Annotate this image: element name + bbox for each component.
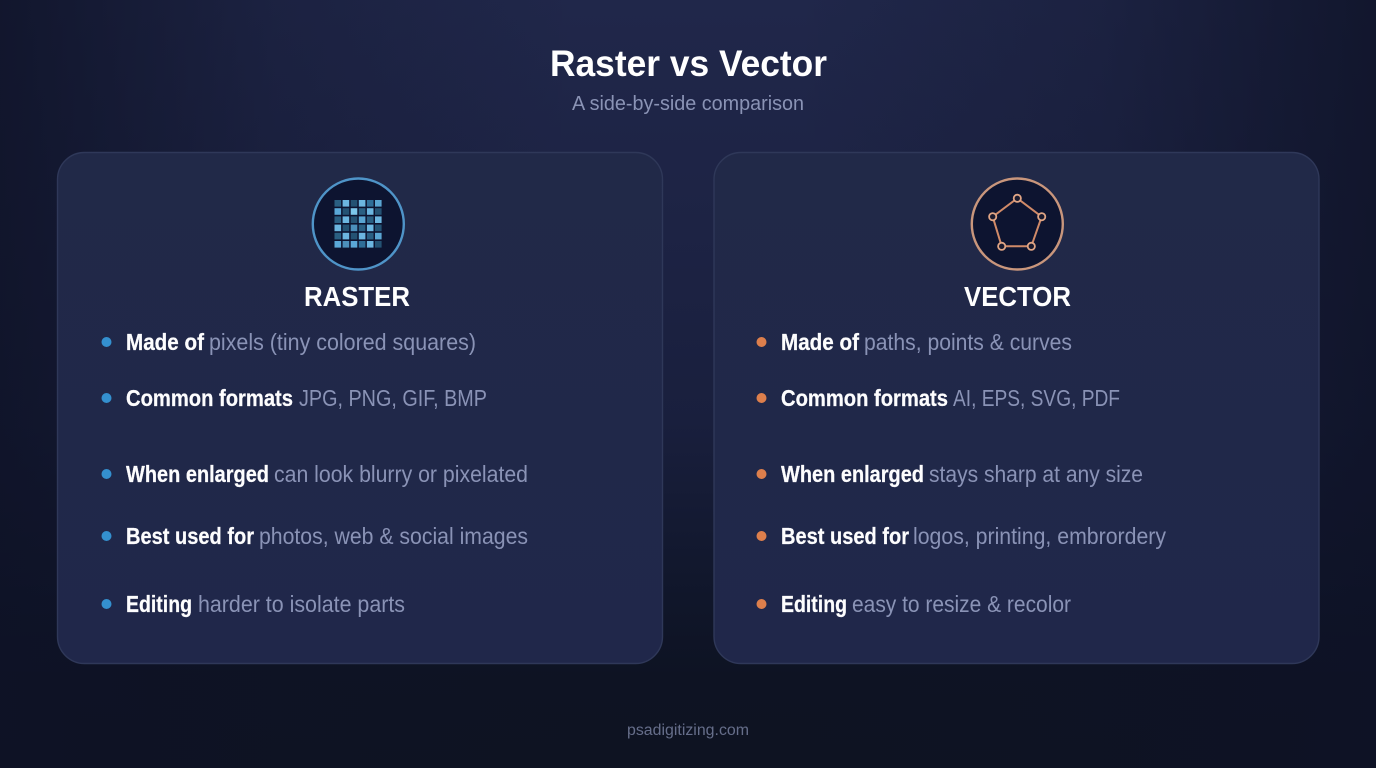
item: when enlarged: When enlarged (126, 461, 269, 487)
heading: raster: RASTER (304, 281, 410, 312)
item: best used for: Best used for (781, 523, 909, 549)
item: common formats (102, 385, 487, 411)
item: best used for: photos, web & social images (259, 523, 528, 549)
panel background: vector (714, 152, 1319, 664)
item: when enlarged: stays sharp at any size (929, 461, 1143, 487)
icon: pixel grid (313, 178, 404, 270)
item: best used for (102, 523, 528, 549)
item: editing: Editing (781, 591, 847, 617)
item: editing: easy to resize & recolor (852, 591, 1071, 617)
item: made of: Made of (126, 329, 204, 355)
item: made of (756, 329, 1072, 355)
item: when enlarged: When enlarged (781, 461, 924, 487)
item: made of: pixels (tiny colored squares) (209, 329, 476, 355)
item: common formats: Common formats (781, 385, 948, 411)
subtitle: A side-by-side comparison (572, 93, 804, 115)
panel background: raster (58, 152, 662, 664)
item: when enlarged (102, 461, 528, 487)
item: made of: Made of (781, 329, 859, 355)
item: editing: harder to isolate parts (198, 591, 405, 617)
panel: raster (58, 152, 662, 664)
item: when enlarged (756, 461, 1143, 487)
item: editing: Editing (126, 591, 192, 617)
item: when enlarged: can look blurry or pixelated (274, 461, 528, 487)
item: common formats: JPG, PNG, GIF, BMP (299, 385, 487, 411)
item: best used for: Best used for (126, 523, 254, 549)
item: editing (756, 591, 1071, 617)
item: common formats: Common formats (126, 385, 293, 411)
item: made of: paths, points & curves (864, 329, 1072, 355)
item: common formats (756, 385, 1120, 411)
footer: website: psadigitizing.com (627, 722, 749, 739)
icon: pentagon path (972, 178, 1063, 270)
item: common formats: AI, EPS, SVG, PDF (953, 385, 1120, 411)
heading: vector: VECTOR (964, 281, 1071, 312)
panel: vector (714, 152, 1319, 664)
item: best used for (756, 523, 1166, 549)
item: editing (102, 591, 405, 617)
item: best used for: logos, printing, embrordery (913, 523, 1166, 549)
item: made of (102, 329, 476, 355)
title: Raster vs Vector (550, 43, 827, 84)
